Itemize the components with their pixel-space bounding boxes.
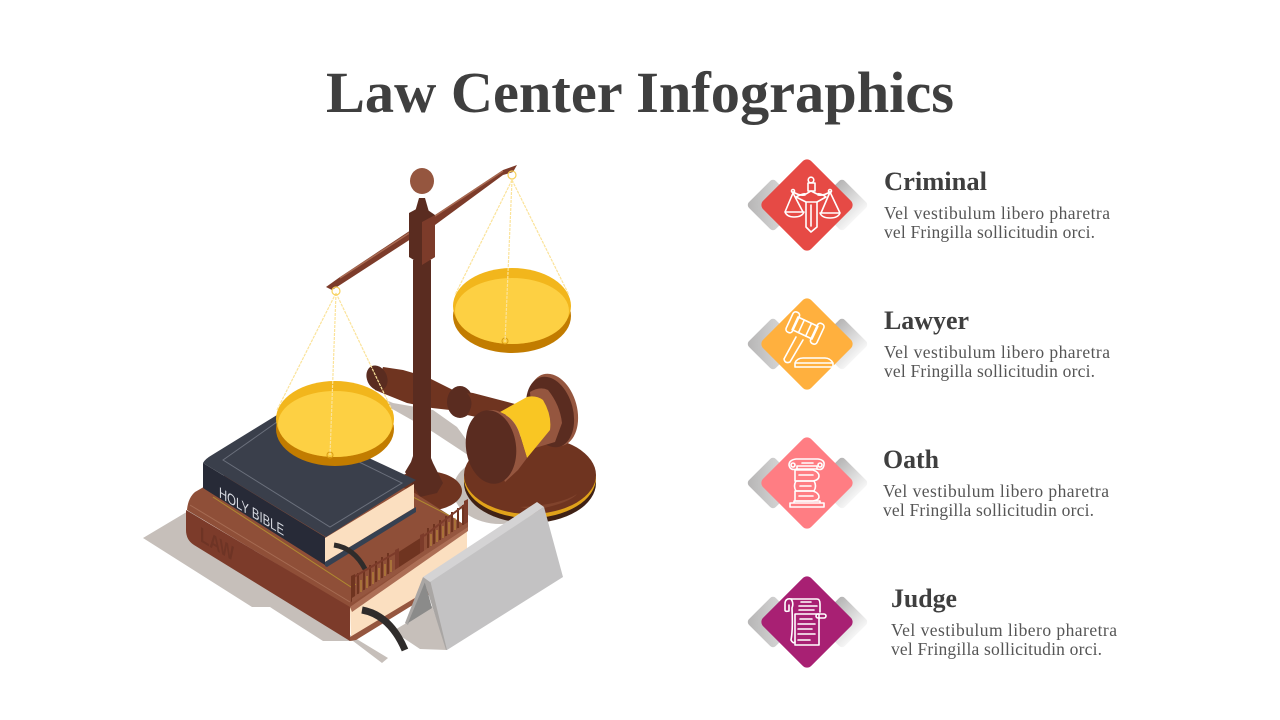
scale post head xyxy=(409,168,435,265)
description: Criminal: Vel vestibulum libero pharetra xyxy=(884,203,1110,223)
right chains xyxy=(455,171,569,342)
item: Oath xyxy=(746,435,1109,531)
icon: scroll document xyxy=(785,599,826,645)
badge: Lawyer xyxy=(746,296,869,392)
description: Judge: Vel vestibulum libero pharetra xyxy=(891,620,1117,640)
badge: Criminal xyxy=(746,157,869,253)
item: Criminal xyxy=(746,157,1110,253)
scale base and column xyxy=(388,260,462,511)
description: Oath: Vel vestibulum libero pharetra xyxy=(883,481,1109,501)
description: Criminal: vel Fringilla sollicitudin orci. xyxy=(884,222,1095,242)
badge: Oath xyxy=(746,435,869,531)
gavel head xyxy=(461,368,586,487)
description: Lawyer: vel Fringilla sollicitudin orci. xyxy=(884,361,1095,381)
left pan xyxy=(276,381,394,466)
railing xyxy=(351,499,468,603)
icon: column of books xyxy=(789,459,824,507)
gavel handle xyxy=(362,362,515,422)
table tent sign xyxy=(405,502,563,650)
description: Lawyer: Vel vestibulum libero pharetra xyxy=(884,342,1110,362)
title: Law Center Infographics xyxy=(326,60,954,125)
left chains xyxy=(277,287,392,455)
item: Lawyer xyxy=(746,296,1110,392)
icon: sword and scales xyxy=(785,177,840,232)
heading: Criminal: Criminal xyxy=(884,167,987,196)
description: Judge: vel Fringilla sollicitudin orci. xyxy=(891,639,1102,659)
right pan xyxy=(453,268,571,353)
law book: LAW xyxy=(200,522,234,566)
holy bible xyxy=(203,415,416,569)
item: Judge xyxy=(746,574,1117,670)
gavel sound block xyxy=(464,436,596,523)
description: Oath: vel Fringilla sollicitudin orci. xyxy=(883,500,1094,520)
badge: Judge xyxy=(746,574,869,670)
heading: Oath: Oath xyxy=(883,445,940,474)
illustration: law scale, books and gavel xyxy=(143,165,596,663)
law book xyxy=(186,445,468,650)
heading: Judge: Judge xyxy=(891,584,957,613)
icon: gavel xyxy=(784,311,833,367)
floor shadow xyxy=(143,392,547,663)
beam of scale xyxy=(326,165,517,290)
heading: Lawyer: Lawyer xyxy=(884,306,969,335)
holy bible: HOLY BIBLE xyxy=(219,484,284,540)
